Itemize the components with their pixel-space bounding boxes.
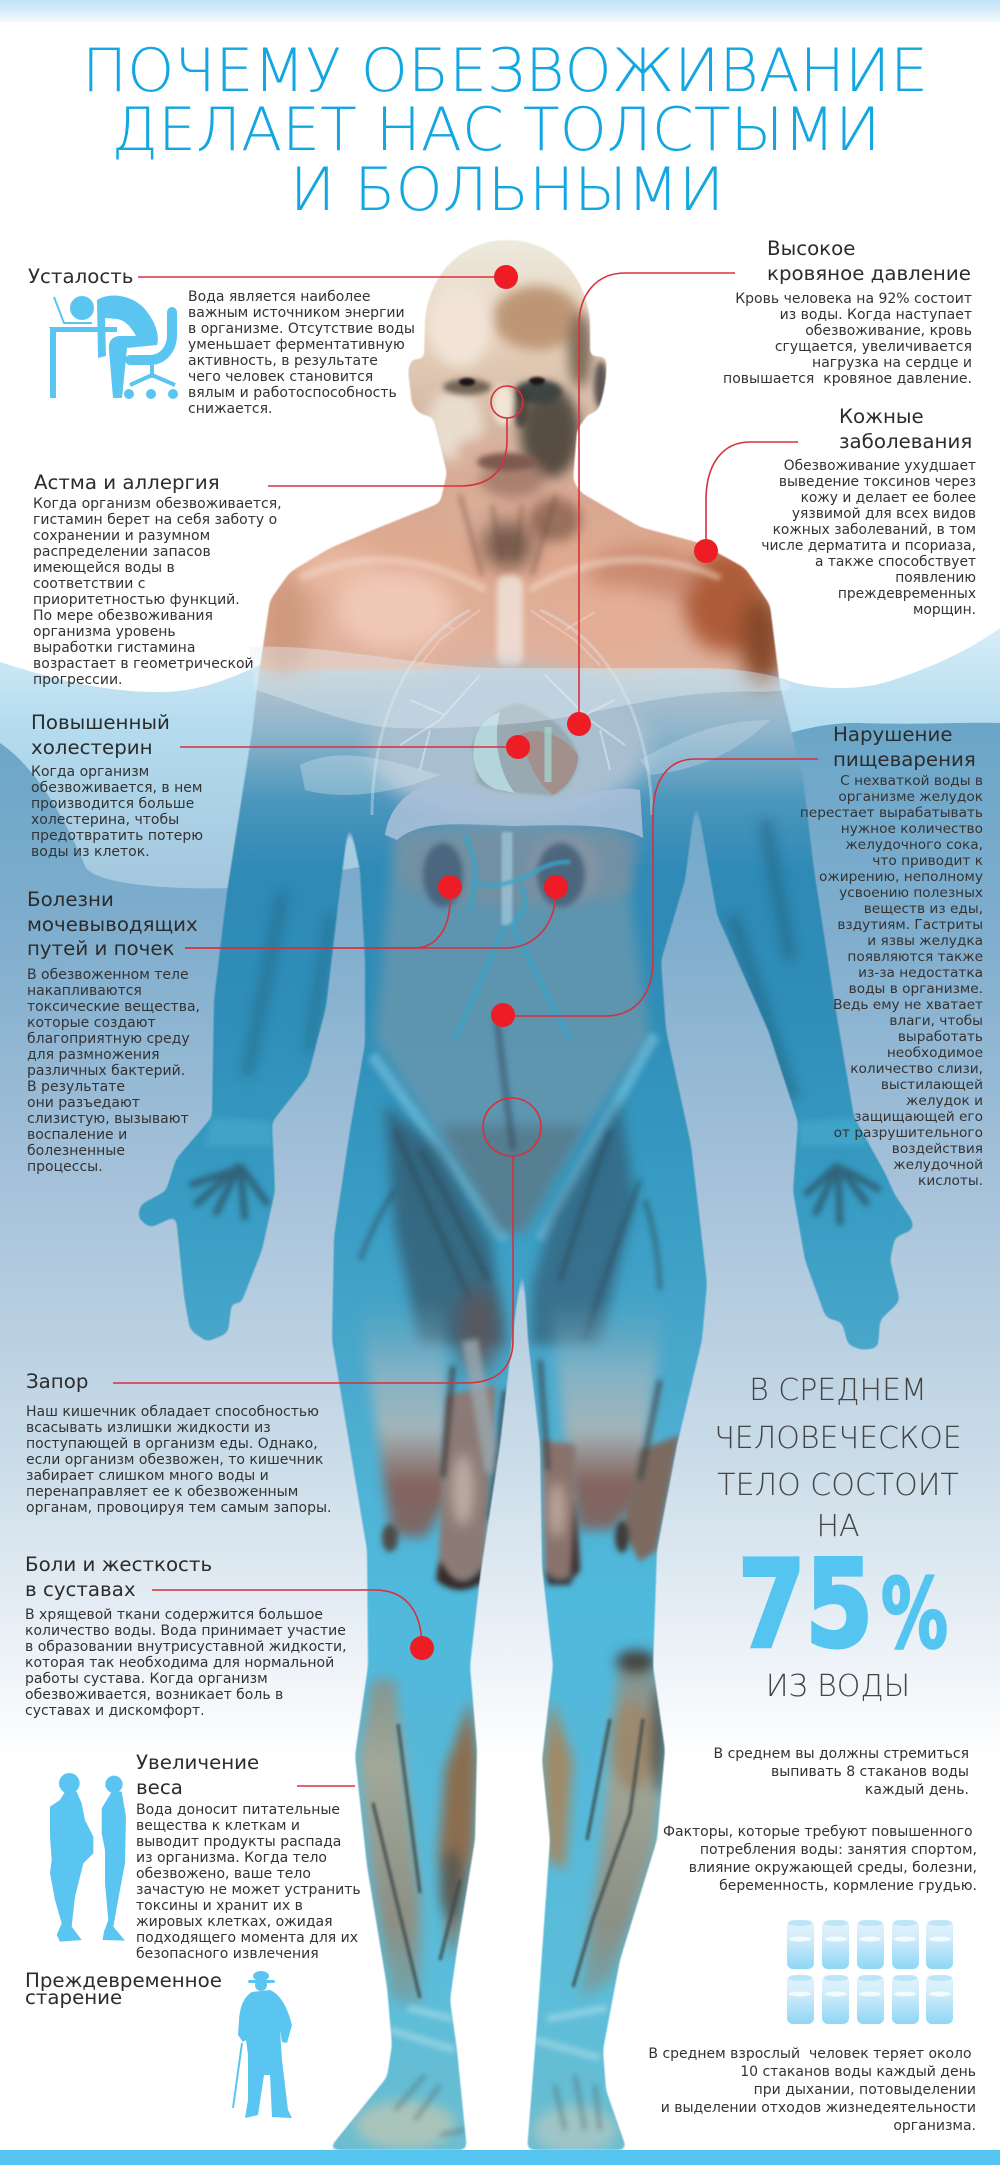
water surface highlights xyxy=(789,1936,951,1996)
text: constipation: перенаправляет ее к обезвоженным xyxy=(26,1484,298,1500)
heading: joint pain xyxy=(25,1553,212,1600)
heading: premature aging xyxy=(25,1969,222,2009)
text: digestive disorders: кислоты. xyxy=(918,1173,983,1189)
top banner strip xyxy=(0,0,1000,22)
text: digestive disorders: перестает вырабатывать xyxy=(800,805,983,821)
diaphragm xyxy=(385,788,643,840)
text: urinary and kidney diseases: В результате xyxy=(27,1079,125,1095)
inner thigh and outer knee muscles xyxy=(438,1385,680,1586)
text: digestive disorders: из-за недостатка xyxy=(858,965,983,981)
text: urinary and kidney diseases: болезненные xyxy=(27,1143,125,1159)
title: ДЕЛАЕТ НАС ТОЛСТЫМИ xyxy=(112,95,880,165)
text: urinary and kidney diseases: В обезвоженном теле xyxy=(27,967,189,983)
text: factors raising water need: Факторы, которые требуют повышенного xyxy=(663,1824,973,1840)
text: weight gain: токсины и хранит их в xyxy=(136,1898,303,1914)
text: constipation: всасывать излишки жидкости из xyxy=(26,1420,271,1436)
text: digestive disorders: нужное количество xyxy=(841,821,983,837)
heading: urinary and kidney diseases: путей и почек xyxy=(27,937,174,960)
text: weight gain: зачастую не может устранить xyxy=(136,1882,361,1898)
text: high cholesterol: обезвоживается, в нем xyxy=(31,780,202,796)
text: fatigue: снижается. xyxy=(188,401,272,417)
heading: constipation: Запор xyxy=(26,1370,88,1393)
neck and collarbone tendons xyxy=(300,495,720,590)
text: skin diseases: числе дерматита и псориаза, xyxy=(761,538,976,554)
text: asthma and allergy: возрастает в геометрической xyxy=(33,656,254,672)
text: daily water loss: организма. xyxy=(893,2118,976,2134)
heading: joint pain: в суставах xyxy=(25,1578,136,1600)
text: high cholesterol xyxy=(31,764,203,860)
text: fatigue: активность, в результате xyxy=(188,353,378,369)
text: asthma and allergy: приоритетностью функций. xyxy=(33,592,240,608)
big number 75%: 75 xyxy=(738,1536,873,1675)
statistic: body water share: ТЕЛО СОСТОИТ xyxy=(717,1468,959,1503)
text: skin diseases: Обезвоживание ухудшает xyxy=(784,458,976,474)
abdominal cavity xyxy=(375,824,650,1232)
heading: joint pain: Боли и жесткость xyxy=(25,1553,212,1576)
heading: urinary and kidney diseases: Болезни xyxy=(27,888,114,911)
text: digestive disorders: желудочной xyxy=(893,1157,983,1173)
toes and foot tendons xyxy=(395,2075,600,2135)
icon: ten glasses of water xyxy=(787,1920,953,2024)
heading: high cholesterol: холестерин xyxy=(31,736,153,758)
text: digestive disorders: появляются также xyxy=(847,949,983,965)
text: high cholesterol: предотвратить потерю xyxy=(31,828,203,844)
text: fatigue: вялым и работоспособность xyxy=(188,385,397,401)
title: И БОЛЬНЫМИ xyxy=(290,155,724,225)
text: urinary and kidney diseases: накапливаются xyxy=(27,983,142,999)
heading: fatigue: Усталость xyxy=(28,265,133,288)
text: high blood pressure: сгущается, увеличивается xyxy=(775,339,972,355)
text: high blood pressure: из воды. Когда наступает xyxy=(780,307,972,323)
text: skin diseases: морщин. xyxy=(913,602,976,618)
liver and stomach xyxy=(398,830,638,906)
text: asthma and allergy: распределении запасов xyxy=(33,544,211,560)
heading: skin diseases xyxy=(839,405,972,452)
text: daily water loss: В среднем взрослый человек теряет около xyxy=(648,2046,972,2062)
icon: tired worker at desk xyxy=(49,296,178,399)
text: digestive disorders: вздутиям. Гастриты xyxy=(837,917,983,933)
heading: digestive disorders xyxy=(833,723,976,770)
heart xyxy=(472,703,579,796)
text: asthma and allergy: сохранении и разумном xyxy=(33,528,210,544)
text: fatigue: важным источником энергии xyxy=(188,305,405,321)
text: skin diseases: преждевременных xyxy=(838,586,976,602)
text: urinary and kidney diseases: токсические вещества, xyxy=(27,999,200,1015)
blood vessels xyxy=(455,832,570,1040)
text: constipation: поступающей в организм еды. Однако, xyxy=(26,1436,318,1452)
text: digestive disorders: ожирению, неполному xyxy=(819,869,983,885)
text: daily water loss: 10 стаканов воды каждый день xyxy=(740,2064,976,2080)
text: digestive disorders: защищающей его xyxy=(854,1109,983,1125)
text: asthma and allergy xyxy=(33,496,282,688)
calf muscles xyxy=(358,1650,665,2005)
text: high cholesterol: Когда организм xyxy=(31,764,149,780)
eyes xyxy=(459,377,545,386)
text: digestive disorders: веществ из еды, xyxy=(864,901,983,917)
text: constipation: Наш кишечник обладает способностью xyxy=(26,1404,319,1420)
text: joint pain: обезвоживается, возникает боль в xyxy=(25,1687,283,1703)
text: skin diseases: кожу и делает ее более xyxy=(801,490,976,506)
text: digestive disorders: от разрушительного xyxy=(834,1125,983,1141)
big number 75%: % xyxy=(881,1558,948,1670)
text: high cholesterol: холестерина, чтобы xyxy=(31,812,179,828)
text: weight gain: Вода доносит питательные xyxy=(136,1802,340,1818)
text: skin diseases: а также способствует xyxy=(815,554,976,570)
heading: high blood pressure: Высокое xyxy=(767,237,855,260)
heading: high blood pressure xyxy=(767,237,971,284)
background water waves xyxy=(0,628,1000,1760)
heading: digestive disorders: Нарушение xyxy=(833,723,952,746)
text: digestive disorders: и язвы желудка xyxy=(867,933,983,949)
text: skin diseases: выведение токсинов через xyxy=(779,474,976,490)
inner thigh highlights xyxy=(452,1454,565,1538)
text: high cholesterol: производится больше xyxy=(31,796,194,812)
text: urinary and kidney diseases: воспаление и xyxy=(27,1127,127,1143)
text: digestive disorders: желудочного сока, xyxy=(845,837,983,853)
text: joint pain: количество воды. Вода принимает участие xyxy=(25,1623,346,1639)
heading: digestive disorders: пищеварения xyxy=(833,748,976,770)
arm shading xyxy=(247,820,793,1099)
chest under water xyxy=(370,667,650,823)
lungs xyxy=(420,610,600,665)
thigh muscle colours xyxy=(358,1300,665,1538)
text: urinary and kidney diseases xyxy=(27,967,200,1175)
heading: urinary and kidney diseases xyxy=(27,888,198,960)
text: digestive disorders: необходимое xyxy=(887,1045,983,1061)
heading: high cholesterol xyxy=(31,711,170,758)
heading: high blood pressure: кровяное давление xyxy=(767,262,971,284)
palm tendons xyxy=(190,1165,880,1225)
face soft colour areas xyxy=(427,283,592,542)
trachea xyxy=(497,575,523,667)
text: fatigue xyxy=(188,289,415,417)
text: urinary and kidney diseases: процессы. xyxy=(27,1159,103,1175)
text: digestive disorders: Ведь ему не хватает xyxy=(833,997,983,1013)
feet xyxy=(355,2101,617,2154)
statistic: body water share: НА xyxy=(816,1509,860,1544)
callout dots xyxy=(410,265,718,1660)
text: high blood pressure: повышается кровяное давление. xyxy=(723,371,972,387)
text: daily water loss xyxy=(648,2046,976,2134)
text: joint pain xyxy=(25,1607,347,1719)
text: digestive disorders xyxy=(800,773,983,1189)
text: daily water intake xyxy=(714,1746,969,1798)
text: asthma and allergy: организма уровень xyxy=(33,624,176,640)
text: digestive disorders: выстилающей xyxy=(881,1077,983,1093)
groin tendons xyxy=(360,1130,660,1340)
heading: weight gain xyxy=(136,1751,259,1798)
text: weight gain: подходящего момента для их xyxy=(136,1930,358,1946)
text: digestive disorders: количество слизи, xyxy=(850,1061,983,1077)
statistic: body water share: ЧЕЛОВЕЧЕСКОЕ xyxy=(714,1421,962,1456)
ankle bands xyxy=(390,2008,607,2058)
bottom banner strip xyxy=(0,2150,1000,2165)
text: constipation xyxy=(26,1404,332,1516)
text: daily water intake: каждый день. xyxy=(865,1782,969,1798)
text: constipation: если организм обезвожен, то кишечник xyxy=(26,1452,323,1468)
text: digestive disorders: влаги, чтобы xyxy=(889,1013,983,1029)
text: asthma and allergy: выработки гистамина xyxy=(33,640,195,656)
text: daily water loss: и выделении отходов жизнедеятельности xyxy=(661,2100,976,2116)
text: asthma and allergy: прогрессии. xyxy=(33,672,123,688)
text: digestive disorders: организме желудок xyxy=(838,789,983,805)
text: constipation: органам, провоцируя тем самым запоры. xyxy=(26,1500,332,1516)
text: joint pain: в образовании внутрисуставной жидкости, xyxy=(25,1639,347,1655)
text: urinary and kidney diseases: которые создают xyxy=(27,1015,156,1031)
text: factors raising water need: беременность, кормление грудью. xyxy=(719,1878,977,1894)
icon: elderly man with cane xyxy=(233,1971,292,2118)
text: weight gain: жировых клетках, ожидая xyxy=(136,1914,333,1930)
heading: asthma and allergy: Астма и аллергия xyxy=(34,471,220,494)
text: urinary and kidney diseases: благоприятную среду xyxy=(27,1031,190,1047)
title xyxy=(82,36,928,225)
text: digestive disorders: желудок и xyxy=(906,1093,983,1109)
heading: premature aging: старение xyxy=(25,1986,122,2009)
text: urinary and kidney diseases: для размножения xyxy=(27,1047,160,1063)
heading: urinary and kidney diseases: мочевыводящих xyxy=(27,912,198,936)
groin brown shade xyxy=(456,1286,500,1374)
text: high blood pressure: обезвоживание, кровь xyxy=(805,323,972,339)
text: weight gain: выводит продукты распада xyxy=(136,1834,341,1850)
statistic: body water share xyxy=(714,1373,962,1704)
face features xyxy=(443,361,608,471)
text: digestive disorders: С нехваткой воды в xyxy=(840,773,983,789)
text: fatigue: Вода является наиболее xyxy=(188,289,370,305)
text: urinary and kidney diseases: различных бактерий. xyxy=(27,1063,185,1079)
text: factors raising water need: потребления воды: занятия спортом, xyxy=(700,1842,977,1858)
text: weight gain: обезвожено, ваше тело xyxy=(136,1866,311,1882)
torso V edges xyxy=(372,1035,655,1240)
heading: weight gain: веса xyxy=(136,1776,183,1798)
text: factors raising water need: влияние окружающей среды, болезни, xyxy=(689,1860,977,1876)
ribcage outline xyxy=(372,610,652,815)
kidneys xyxy=(423,843,585,907)
text: skin diseases: уязвимой для всех видов xyxy=(792,506,976,522)
text: asthma and allergy: соответствии с xyxy=(33,576,145,592)
text: digestive disorders: воды в организме. xyxy=(849,981,983,997)
statistic: body water share: В СРЕДНЕМ xyxy=(749,1373,927,1408)
text: digestive disorders: воздействия xyxy=(892,1141,983,1157)
text: urinary and kidney diseases: слизистую, вызывают xyxy=(27,1111,189,1127)
text: daily water loss: при дыхании, потовыделении xyxy=(754,2082,976,2098)
text: joint pain: которая так необходима для нормальной xyxy=(25,1655,334,1671)
heading: skin diseases: заболевания xyxy=(839,430,972,452)
text: joint pain: работы сустава. Когда организм xyxy=(25,1671,268,1687)
text: asthma and allergy: Когда организм обезвоживается, xyxy=(33,496,282,512)
text: digestive disorders: выработать xyxy=(898,1029,983,1045)
chest and shoulder muscles xyxy=(259,521,784,686)
text: weight gain: из организма. Когда тело xyxy=(136,1850,327,1866)
text: digestive disorders: что приводит к xyxy=(872,853,983,869)
text: daily water intake: В среднем вы должны стремиться xyxy=(714,1746,969,1762)
lower abdomen and centre line xyxy=(440,1020,585,1232)
glass rims xyxy=(788,1920,952,1981)
text: joint pain: суставах и дискомфорт. xyxy=(25,1703,205,1719)
heading: skin diseases: Кожные xyxy=(839,405,924,428)
knee hollows and thigh tendons xyxy=(382,1340,660,1590)
text: asthma and allergy: имеющейся воды в xyxy=(33,560,175,576)
wrist bands xyxy=(205,1117,868,1146)
text: factors raising water need xyxy=(663,1824,977,1894)
text: skin diseases: кожных заболеваний, в том xyxy=(773,522,976,538)
text: weight gain: вещества к клеткам и xyxy=(136,1818,300,1834)
body base colour xyxy=(120,230,930,2155)
anatomical human body xyxy=(120,230,930,2155)
text: fatigue: чего человек становится xyxy=(188,369,373,385)
text: fatigue: в организме. Отсутствие воды xyxy=(188,321,415,337)
text: urinary and kidney diseases: они разъедают xyxy=(27,1095,140,1111)
heading: high cholesterol: Повышенный xyxy=(31,711,170,734)
text: asthma and allergy: гистамин берет на себя заботу о xyxy=(33,512,277,528)
text: skin diseases: появлению xyxy=(895,570,976,586)
text: skin diseases xyxy=(761,458,976,618)
heading: weight gain: Увеличение xyxy=(136,1751,259,1774)
statistic: body water share: ИЗ ВОДЫ xyxy=(766,1669,910,1704)
text: high blood pressure: нагрузка на сердце и xyxy=(812,355,972,371)
text: daily water intake: выпивать 8 стаканов воды xyxy=(771,1764,969,1780)
text: weight gain xyxy=(136,1802,361,1962)
text: asthma and allergy: По мере обезвоживания xyxy=(33,608,213,624)
text: weight gain: безопасного извлечения xyxy=(136,1946,319,1962)
text: digestive disorders: усвоению полезных xyxy=(839,885,983,901)
groin and inner thigh muscles xyxy=(385,1100,635,1345)
calf tendons xyxy=(373,1719,643,1998)
heading: premature aging: Преждевременное xyxy=(25,1969,222,1992)
text: fatigue: уменьшает ферментативную xyxy=(188,337,405,353)
glass bodies xyxy=(787,1920,953,2024)
text: high blood pressure: Кровь человека на 92% состоит xyxy=(735,291,972,307)
translucent water over chest xyxy=(249,647,791,795)
title: ПОЧЕМУ ОБЕЗВОЖИВАНИЕ xyxy=(82,36,928,106)
callout lines xyxy=(113,273,818,1786)
text: high cholesterol: воды из клеток. xyxy=(31,844,150,860)
text: joint pain: В хрящевой ткани содержится большое xyxy=(25,1607,323,1623)
icon: fat and thin silhouettes xyxy=(50,1773,126,1942)
text: constipation: забирает слишком много воды и xyxy=(26,1468,269,1484)
text: high blood pressure xyxy=(723,291,972,387)
